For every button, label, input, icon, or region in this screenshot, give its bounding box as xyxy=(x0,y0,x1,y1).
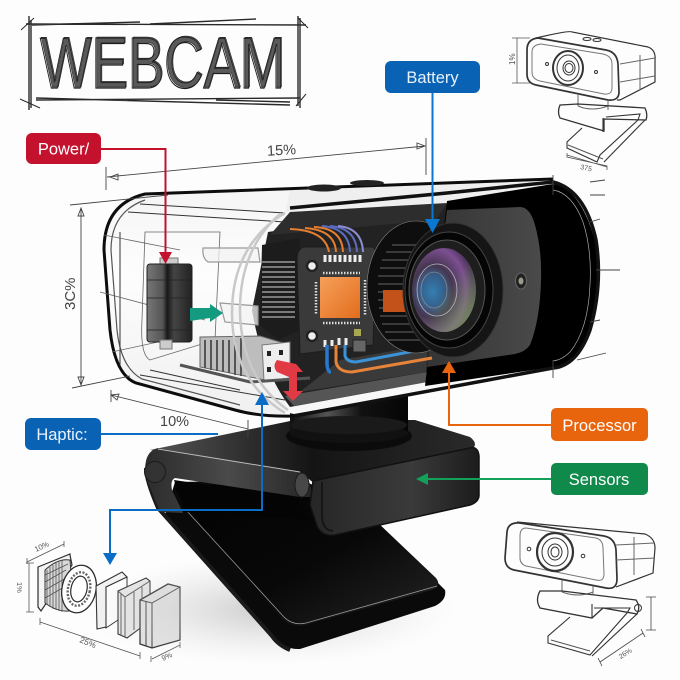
dimension lines xyxy=(70,138,620,438)
sketch: exploded components bottom left xyxy=(26,541,180,662)
callout: Battery: Battery xyxy=(406,69,459,87)
sketch labels: exploded components xyxy=(15,539,174,663)
sketch labels: top right xyxy=(508,53,593,173)
body: housing outline xyxy=(104,179,553,416)
lens: outer ring xyxy=(403,223,503,357)
body: black front shell xyxy=(425,184,599,386)
neck ring xyxy=(286,395,412,451)
sketch labels: exploded components: 9% xyxy=(160,650,174,663)
component: small heatsink xyxy=(180,336,310,382)
title: WEBCAM in sketched frame: WEBCAM xyxy=(40,24,285,104)
sketch labels: exploded components: 1% xyxy=(15,582,24,593)
callout: Power: Power/ xyxy=(38,140,90,158)
body: top buttons xyxy=(307,184,341,192)
component: bracket clip xyxy=(203,248,260,325)
component: ribbon cables xyxy=(290,226,432,372)
stand: base plate xyxy=(165,480,445,649)
body: transparent housing xyxy=(104,180,553,416)
sketch: webcam top right xyxy=(512,32,655,170)
inner components xyxy=(147,213,432,413)
lens: sensor dot xyxy=(516,273,526,289)
callout: Sensors: Sensors xyxy=(569,471,629,489)
stand: top plate xyxy=(150,420,475,488)
callout: Haptic: Haptic: xyxy=(36,426,88,444)
sketch label: bottom right: 26% xyxy=(618,647,634,661)
teal arrow xyxy=(190,304,223,322)
dimension labels: 3C% xyxy=(62,277,79,310)
component: circuit board xyxy=(297,247,376,354)
callout: Processor: Processor xyxy=(562,417,637,435)
sketch labels: top right: 375 xyxy=(580,164,593,173)
webcam stand xyxy=(144,420,479,650)
title: WEBCAM in sketched frame: WEBCAM xyxy=(41,23,286,103)
callout: Sensors xyxy=(416,463,648,495)
component: bracket ring xyxy=(232,213,288,413)
webcam body xyxy=(100,179,599,416)
sketch: webcam bottom right xyxy=(505,522,656,666)
component: processor heat sink xyxy=(260,238,300,340)
dimension labels xyxy=(62,142,297,430)
lens: glass xyxy=(412,248,476,332)
callout: Haptic xyxy=(25,392,269,565)
title: WEBCAM in sketched frame xyxy=(20,16,308,110)
component: battery xyxy=(147,258,192,349)
callout: Power xyxy=(26,133,172,264)
stand shadow xyxy=(85,555,455,665)
body: dark interior xyxy=(252,204,447,407)
dimension labels: 10% xyxy=(160,414,189,430)
callout: Battery xyxy=(385,61,480,233)
lens xyxy=(367,221,526,357)
dimension labels: 15% xyxy=(267,142,297,160)
stand: hinge arm xyxy=(145,448,312,513)
red double arrow xyxy=(274,360,303,401)
sketch labels: top right: 1% xyxy=(508,53,517,65)
sketch labels: exploded components: 10% xyxy=(33,539,51,554)
sketch labels: exploded components: 25% xyxy=(78,635,98,650)
callout: Processor xyxy=(442,361,648,441)
stand: front block xyxy=(310,448,479,535)
lens: barrel xyxy=(367,221,465,353)
